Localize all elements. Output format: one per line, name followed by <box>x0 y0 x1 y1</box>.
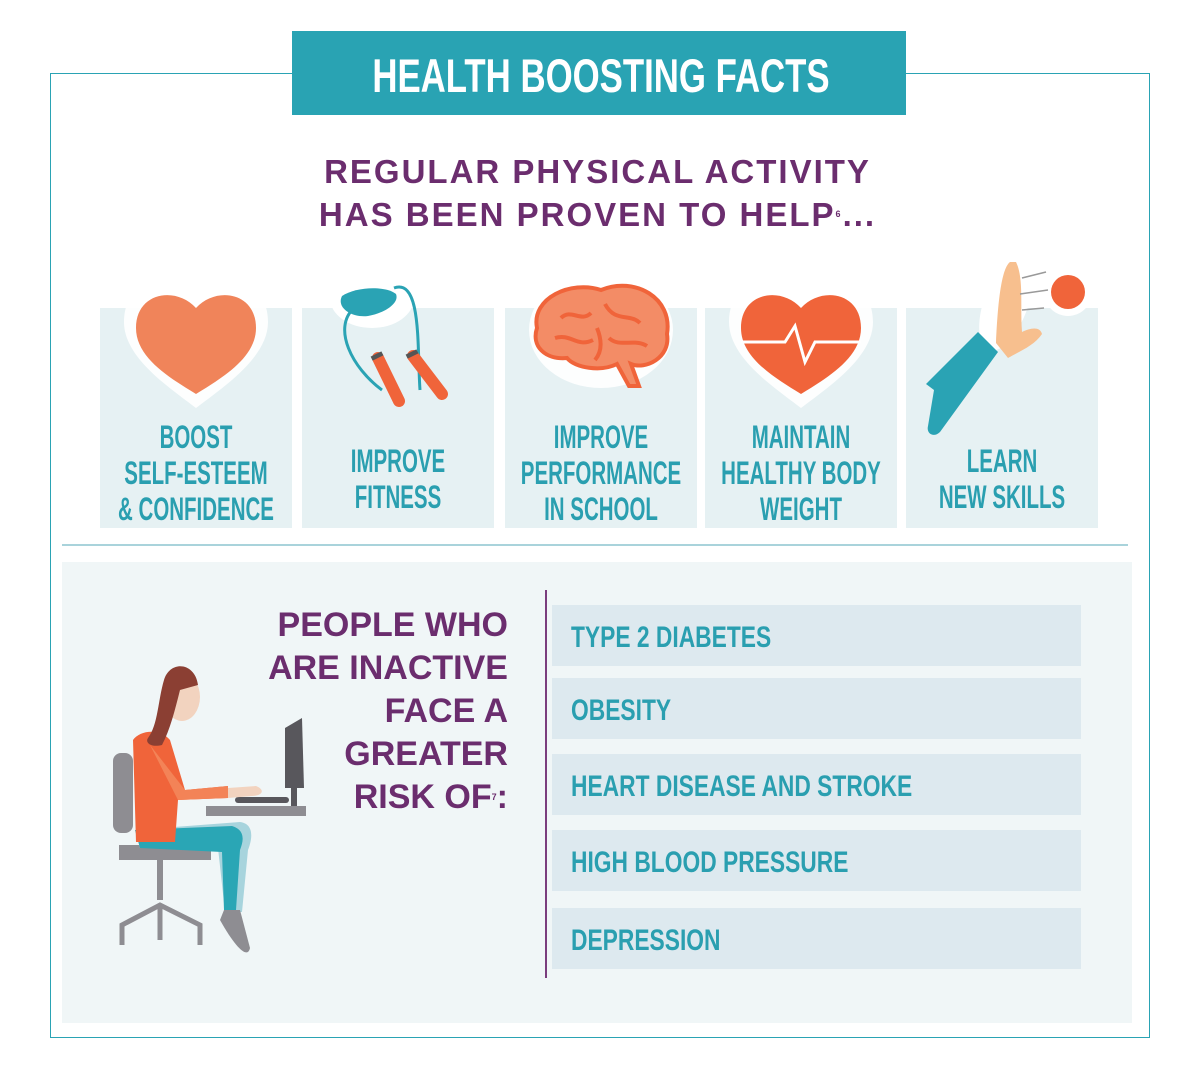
risk: high blood pressure: HIGH BLOOD PRESSURE <box>571 846 848 879</box>
label: IN SCHOOL <box>544 491 658 527</box>
label <box>939 443 1065 515</box>
panel: inactivity risks <box>62 562 1132 1023</box>
label <box>721 419 881 527</box>
label <box>351 443 445 515</box>
card: improve fitness <box>302 308 494 528</box>
risk: high blood pressure <box>552 830 1081 891</box>
heading: people who are inactive: RISK OF7: <box>354 778 508 816</box>
risk: diabetes: TYPE 2 DIABETES <box>571 621 771 654</box>
risk: diabetes <box>552 605 1081 666</box>
card: improve performance <box>505 308 697 528</box>
divider <box>62 544 1128 546</box>
label <box>118 419 274 527</box>
title banner <box>292 31 906 115</box>
icon: heart with pulse <box>729 295 873 408</box>
icon: hand throwing ball <box>926 262 1086 435</box>
heading: people who are inactive: ARE INACTIVE <box>268 649 508 687</box>
label: NEW SKILLS <box>939 479 1065 515</box>
label: SELF-ESTEEM <box>124 455 268 491</box>
risk list <box>552 605 1081 969</box>
vertical divider <box>545 590 546 978</box>
card: maintain weight <box>705 308 897 528</box>
label: FITNESS <box>355 479 441 515</box>
icon: jump rope <box>332 286 448 407</box>
icon: brain <box>529 284 673 388</box>
label: IMPROVE <box>554 419 648 455</box>
label: LEARN <box>967 443 1037 479</box>
label: WEIGHT <box>760 491 842 527</box>
risk: obesity <box>552 678 1081 739</box>
label: PERFORMANCE <box>521 455 681 491</box>
risk: obesity: OBESITY <box>571 694 671 727</box>
icon: heart <box>124 295 268 408</box>
illustration: person at computer <box>113 666 306 952</box>
heading: people who are inactive <box>268 606 508 816</box>
risk: heart disease <box>552 754 1081 815</box>
label: IMPROVE <box>351 443 445 479</box>
risk: depression: DEPRESSION <box>571 924 721 957</box>
risk: depression <box>552 908 1081 969</box>
heading: people who are inactive: FACE A <box>385 692 508 730</box>
risk: heart disease: HEART DISEASE AND STROKE <box>571 770 912 803</box>
label: HEALTHY BODY <box>721 455 881 491</box>
label: & CONFIDENCE <box>118 491 274 527</box>
label: MAINTAIN <box>752 419 850 455</box>
subtitle: REGULAR PHYSICAL ACTIVITY <box>324 153 871 190</box>
label: BOOST <box>160 419 232 455</box>
subtitle: HAS BEEN PROVEN TO HELP6... <box>319 196 876 233</box>
card: boost self-esteem <box>100 308 292 528</box>
label <box>521 419 681 527</box>
heading: people who are inactive: GREATER <box>344 735 508 773</box>
title banner: HEALTH BOOSTING FACTS <box>372 49 830 102</box>
heading: people who are inactive: PEOPLE WHO <box>278 606 508 644</box>
card: learn skills <box>906 308 1098 528</box>
subtitle <box>319 153 876 233</box>
